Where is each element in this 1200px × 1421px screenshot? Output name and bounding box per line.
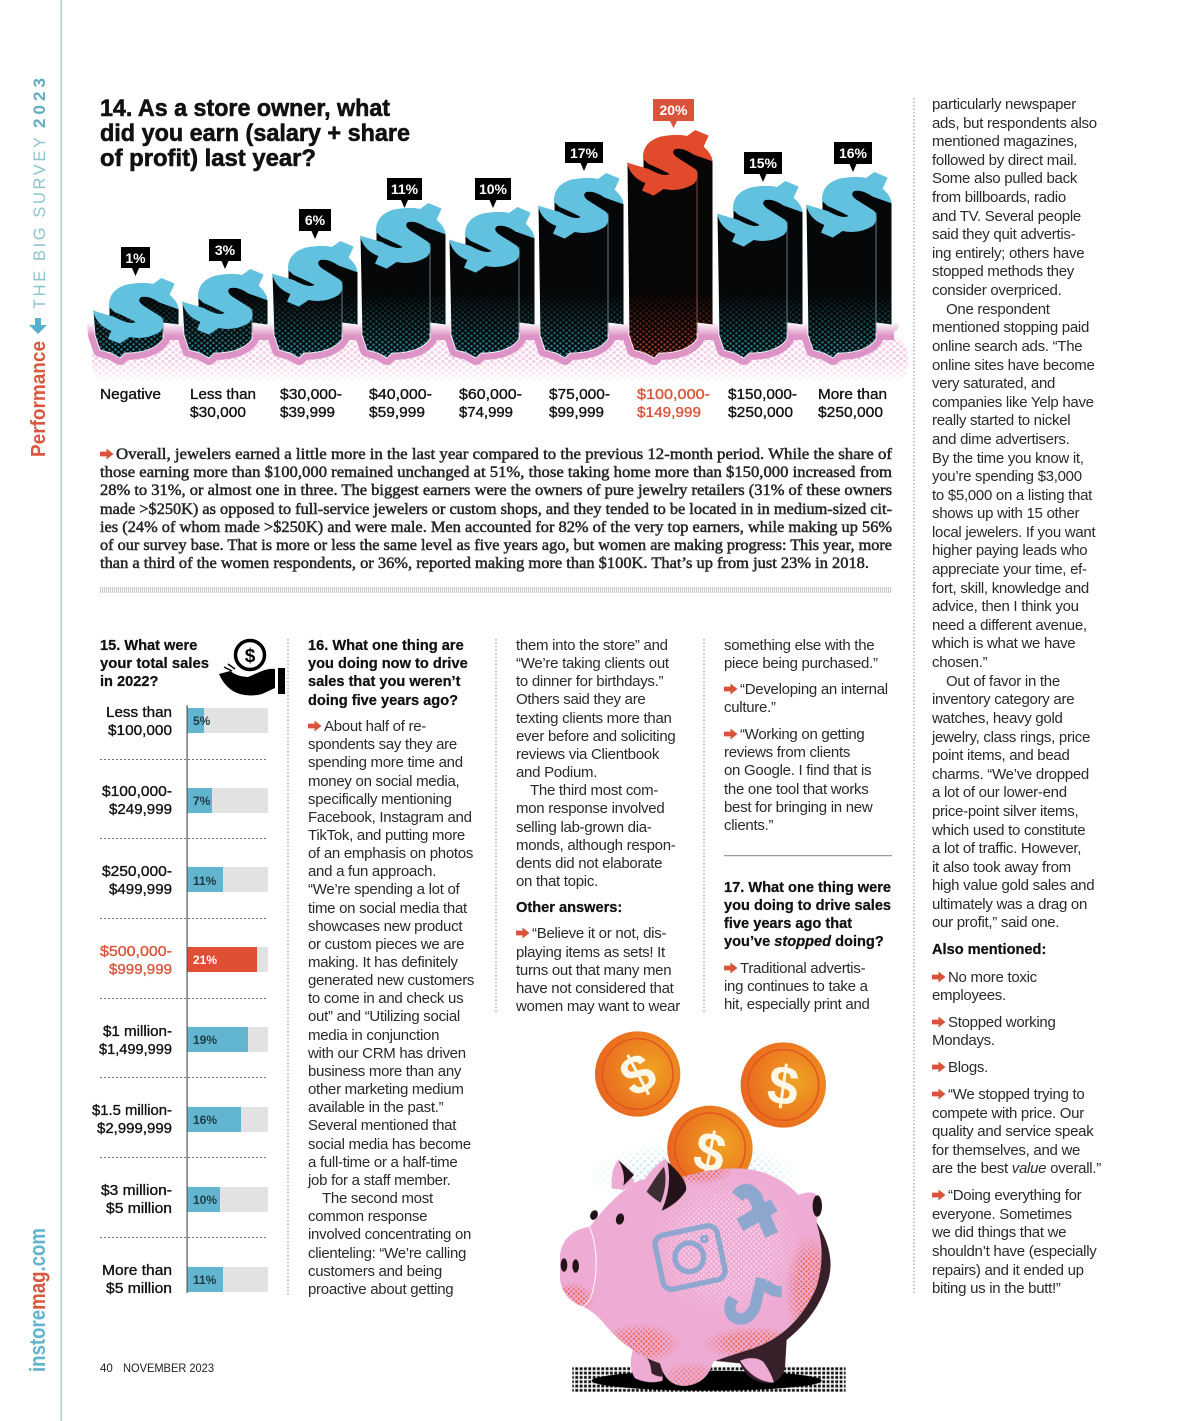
- column: right text: Also mentioned:: [932, 942, 1046, 958]
- bar: less than $100,000: 5%: [193, 714, 211, 728]
- bar: $1.5 million-$2,999,999: [92, 1102, 268, 1137]
- icon: center coin: $: [689, 1118, 731, 1185]
- bar: $40,000-$59,999 11%: 11%: [391, 181, 419, 197]
- heading question 17: you’ve stopped doing?: [724, 934, 884, 950]
- body text: spending more time and: [308, 754, 463, 771]
- heading question 15: [100, 638, 209, 690]
- bar: $3 million-$5 million: [101, 1182, 268, 1217]
- column: right text: By the time you know it,: [932, 450, 1084, 467]
- column: right text: really started to nickel: [932, 412, 1070, 429]
- column: right text: high value gold sales and: [932, 877, 1094, 894]
- body text: generated new customers: [308, 972, 474, 989]
- column: right text: companies like Yelp have: [932, 394, 1094, 411]
- chart category labels: Negative: [100, 386, 161, 403]
- body text: specifically mentioning: [308, 791, 452, 808]
- column: answers and question 17: [724, 637, 892, 1013]
- heading question 17: 17. What one thing were: [724, 880, 891, 896]
- chart category labels: $59,999: [369, 404, 425, 421]
- body text: spondents say they are: [308, 736, 457, 753]
- sidebar: website: instoremag.com: [25, 1228, 50, 1372]
- column: right text: consider overpriced.: [932, 282, 1061, 299]
- column: right text: mentioned stopping paid: [932, 319, 1089, 336]
- heading question 16: 16. What one thing are: [308, 638, 464, 654]
- bar: $100,000-$249,999: [102, 783, 268, 818]
- bar: $1.5 million-$2,999,999: 16%: [193, 1113, 217, 1127]
- chart category labels: $250,000: [728, 404, 793, 421]
- column: question 16 continued: dents did not elaborate: [516, 855, 662, 872]
- column: right text: said they quit advertis-: [932, 226, 1076, 243]
- body text: [307, 718, 474, 1298]
- summary paragraph: than a third of the women respondents, or 36%, reported making more than $100K. That’s up from just 23% in 2018.: [100, 555, 869, 572]
- summary paragraph: of our survey base. That is more or less the same level as five years ago, but women are making progress: This year, more: [100, 537, 892, 554]
- chart category labels: $30,000-: [280, 386, 342, 403]
- icon: right coin: $: [764, 1052, 803, 1118]
- column: question 16 continued: monds, although respon-: [516, 837, 676, 854]
- column: right text: repairs) and it ended up: [932, 1262, 1084, 1279]
- bar: $40,000-$59,999 11%: [360, 178, 446, 358]
- heading question 16: doing five years ago?: [308, 693, 458, 709]
- summary paragraph: 28% to 31%, or almost one in three. The biggest earners were the owners of pure jewelry retailers (31% of these owners: [100, 482, 892, 499]
- dotted row dividers: [100, 760, 268, 1238]
- bar axis: [186, 705, 188, 1293]
- body text: and a fun approach.: [308, 863, 436, 880]
- column: right text: “We stopped trying to: [948, 1086, 1084, 1103]
- column: answers and question 17: culture.”: [724, 699, 776, 716]
- bar: $500,000-$999,999 highlighted: [100, 943, 268, 978]
- chart category labels: $74,999: [459, 404, 513, 421]
- column: right text: biting us in the butt!”: [932, 1280, 1061, 1297]
- title question 14: did you earn (salary + share: [100, 120, 410, 147]
- column: question 16 continued: mon response involved: [516, 800, 664, 817]
- column: answers and question 17: on Google. I find that is: [724, 762, 871, 779]
- body text: of an emphasis on photos: [308, 845, 473, 862]
- chart category labels: $39,999: [280, 404, 335, 421]
- column: right text: for themselves, and we: [932, 1142, 1080, 1159]
- column: question 16 continued: selling lab-grown dia-: [516, 819, 652, 836]
- column: right text: ing entirely; others have: [932, 245, 1084, 262]
- column: right text: and dime advertisers.: [932, 431, 1070, 448]
- column: right text: are the best value overall.”: [932, 1160, 1101, 1177]
- bar: more than $5 million: $5 million: [106, 1280, 172, 1297]
- summary paragraph: [100, 446, 893, 572]
- column: right text: jewelry, class rings, price: [931, 729, 1090, 746]
- bar: more than $5 million: [102, 1262, 268, 1297]
- column: question 16 continued: The third most com-: [530, 782, 658, 799]
- pale halftone behind pig: [597, 1144, 796, 1197]
- column: answers and question 17: ing continues to take a: [724, 978, 869, 995]
- footer page number: 40: [100, 1363, 113, 1375]
- column: right text: particularly newspaper: [932, 96, 1076, 113]
- column: question 16: [307, 638, 474, 1298]
- bar: $1.5 million-$2,999,999: $2,999,999: [97, 1120, 172, 1137]
- bar: $100,000-$249,999: $100,000-: [102, 783, 172, 800]
- chart category labels: $99,999: [549, 404, 604, 421]
- bar: $75,000-$99,999 17%: [538, 142, 624, 358]
- column: question 16 continued: ever before and soliciting: [516, 728, 676, 745]
- body text: money on social media,: [308, 773, 459, 790]
- sidebar: section title: [28, 78, 50, 457]
- pig far ear: [612, 1160, 635, 1190]
- column: question 16 continued: [515, 637, 680, 1015]
- icon: facebook logo: [737, 1191, 774, 1235]
- pig far leg: [740, 1358, 774, 1383]
- bar: $1.5 million-$2,999,999: $1.5 million-: [92, 1102, 172, 1119]
- column: question 16 continued: Other answers:: [516, 900, 622, 916]
- pig dark far side: [713, 1220, 831, 1383]
- bar: less than $100,000: $100,000: [108, 722, 172, 739]
- column: right text: shows up with 15 other: [932, 505, 1080, 522]
- sidebar: section title: Performance: [28, 341, 50, 457]
- bar: $250,000-$499,999: $499,999: [109, 881, 172, 898]
- pink halo: [87, 323, 899, 365]
- bar: $75,000-$99,999 17%: 17%: [570, 145, 599, 161]
- bar: more than $5 million: More than: [102, 1262, 172, 1279]
- body text: showcases new product: [308, 918, 463, 935]
- column: right text: appreciate your time, ef-: [932, 561, 1087, 578]
- column: right text: charms. “We’ve dropped: [932, 766, 1089, 783]
- bar: $30,000-$39,999 6%: 6%: [305, 212, 326, 228]
- bar: $100,000-$249,999: $249,999: [109, 801, 172, 818]
- column: answers and question 17: hit, especially print and: [724, 996, 870, 1013]
- bar: $500,000-$999,999 highlighted: $999,999: [109, 961, 172, 978]
- summary paragraph: those earning more than $100,000 remained unchanged at 51%, those taking home more than $150,000 increased from: [100, 464, 893, 481]
- sidebar rule: [60, 0, 62, 1421]
- chart category labels: $60,000-: [459, 386, 522, 403]
- chart category labels: $149,999: [637, 404, 701, 421]
- column: question 16 continued: reviews via Clientbook: [516, 746, 660, 763]
- bar: $3 million-$5 million: $5 million: [106, 1200, 172, 1217]
- icon: left coin: $: [610, 1040, 666, 1109]
- column: answers and question 17: “Developing an internal: [740, 681, 888, 698]
- icon: right coin: [741, 1042, 826, 1128]
- column: right text: advice, then I think you: [932, 598, 1079, 615]
- column: right text: it also took away from: [932, 859, 1071, 876]
- column: answers and question 17: “Working on getting: [740, 726, 864, 743]
- column: right text: Blogs.: [948, 1059, 988, 1076]
- heading question 17: [724, 880, 891, 950]
- column: right text: followed by direct mail.: [932, 152, 1077, 169]
- column: question 16 continued: them into the store” and: [516, 637, 668, 654]
- body text: to come in and check us: [308, 990, 463, 1007]
- body text: “We’re spending a lot of: [308, 881, 461, 898]
- bar: $3 million-$5 million: 10%: [193, 1193, 217, 1207]
- column: question 16 continued: women may want to wear: [515, 998, 680, 1015]
- heading question 16: sales that you weren’t: [308, 674, 461, 690]
- bar: $250,000-$499,999: $250,000-: [102, 863, 172, 880]
- body text: job for a staff member.: [307, 1172, 451, 1189]
- pink halftone ground: [92, 338, 908, 380]
- icon: tiktok logo: [730, 1278, 782, 1319]
- column: answers and question 17: best for bringing in new: [724, 799, 873, 816]
- bar: $500,000-$999,999 highlighted: 21%: [193, 953, 217, 967]
- heading question 15: in 2022?: [100, 674, 158, 690]
- column: right text: Stopped working: [948, 1014, 1056, 1031]
- bar: $1 million-$1,499,999: [99, 1023, 268, 1058]
- body text: The second most: [322, 1190, 434, 1207]
- column: question 16 continued: to dinner for birthdays.”: [516, 673, 664, 690]
- chart category labels: [100, 386, 887, 421]
- summary paragraph: ies (24% of whom made >$250K) and were male. Men accounted for 82% of the very top earners, while making up 56%: [100, 519, 892, 536]
- column: right text: we did things that we: [931, 1224, 1066, 1241]
- column: right text: point items, and bead: [932, 747, 1070, 764]
- column: answers and question 17: clients.”: [724, 817, 773, 834]
- column: question 16 continued: Others said they are: [516, 691, 645, 708]
- bar: Negative 1%: [93, 247, 179, 358]
- chart category labels: More than: [818, 386, 887, 403]
- column: question 16 continued: playing items as sets! It: [516, 944, 666, 961]
- column: answers and question 17: something else with the: [724, 637, 874, 654]
- body text: making. It has definitely: [308, 954, 459, 971]
- bar: $30,000-$39,999 6%: [272, 209, 358, 358]
- column: right text: stopped methods they: [932, 263, 1075, 280]
- title question 14: 14. As a store owner, what: [100, 95, 390, 122]
- column: right text: ultimately was a drag on: [932, 896, 1087, 913]
- column: question 16 continued: turns out that many men: [516, 962, 671, 979]
- body text: available in the past.”: [308, 1099, 444, 1116]
- column: right text: price-point silver items,: [932, 803, 1078, 820]
- bar: less than $100,000: [106, 704, 268, 739]
- column: right text: watches, heavy gold: [931, 710, 1063, 727]
- column: right text: higher paying leads who: [932, 542, 1087, 559]
- pig near back leg: [631, 1348, 663, 1382]
- heading question 16: [308, 638, 468, 709]
- column: right text: very saturated, and: [932, 375, 1055, 392]
- body text: common response: [308, 1208, 427, 1225]
- body text: a full-time or a half-time: [308, 1154, 457, 1171]
- heading question 17: five years ago that: [724, 916, 852, 932]
- bar: $150,000-$250,000 15%: 15%: [749, 155, 778, 171]
- column: right text: ads, but respondents also: [932, 115, 1097, 132]
- column: right text: everyone. Sometimes: [932, 1206, 1072, 1223]
- column: right text: [931, 96, 1101, 1297]
- heading question 15: your total sales: [100, 656, 209, 672]
- heading question 17: you doing to drive sales: [724, 898, 891, 914]
- icon: instagram logo: [653, 1224, 727, 1291]
- column: right text: to $5,000 on a listing that: [932, 487, 1093, 504]
- column: question 16 continued: on that topic.: [516, 873, 598, 890]
- summary paragraph: made >$250K) as opposed to full-service jewelers or custom shops, and they tended to be located in in medium-sized cit-: [100, 501, 892, 518]
- bar: Negative 1%: 1%: [125, 250, 146, 266]
- column: right text: employees.: [932, 987, 1006, 1004]
- column: question 16 continued: “Believe it or not, dis-: [532, 925, 666, 942]
- column: question 16 continued: “We’re taking clients out: [516, 655, 670, 672]
- column: answers and question 17: piece being purchased.”: [724, 655, 878, 672]
- chart category labels: $40,000-: [369, 386, 432, 403]
- pig near ear: [639, 1158, 686, 1211]
- chart category labels: $30,000: [190, 404, 246, 421]
- column: right text: Out of favor in the: [946, 673, 1060, 690]
- column: right text: need a different avenue,: [932, 617, 1087, 634]
- bar: $150,000-$250,000 15%: [717, 152, 803, 358]
- body text: business more than any: [308, 1063, 462, 1080]
- column: answers and question 17: the one tool that works: [724, 781, 868, 798]
- column: right text: which is what we have: [931, 635, 1075, 652]
- illustration: piggy bank with coins: [548, 1031, 846, 1392]
- icon: hand holding coin: $: [245, 646, 256, 667]
- bar: $1 million-$1,499,999: $1,499,999: [99, 1041, 172, 1058]
- pig snout edge: [582, 1227, 596, 1307]
- title question 14: of profit) last year?: [100, 145, 316, 172]
- bar: More than $250,000 16%: 16%: [839, 145, 868, 161]
- pig halftone shading: [548, 1155, 835, 1392]
- column: right text: quality and service speak: [932, 1123, 1094, 1140]
- column: right text: a lot of traffic. However,: [932, 840, 1081, 857]
- body text: media in conjunction: [308, 1027, 439, 1044]
- bar: $100,000-$249,999: 7%: [193, 794, 211, 808]
- column: right text: No more toxic: [948, 969, 1038, 986]
- column: right text: which used to constitute: [931, 822, 1085, 839]
- column: right text: online sites have become: [932, 357, 1095, 374]
- bar: Less than $30,000 3%: [182, 239, 268, 358]
- column: right text: from billboards, radio: [932, 189, 1066, 206]
- panel: question 15 total sales: [92, 638, 285, 1297]
- body text: Facebook, Instagram and: [308, 809, 472, 826]
- column: right text: fort, skill, knowledge and: [932, 580, 1089, 597]
- column: right text: and TV. Several people: [932, 208, 1081, 225]
- column: right text: mentioned magazines,: [932, 133, 1077, 150]
- body text: Several mentioned that: [308, 1117, 457, 1134]
- title question 14: [100, 95, 410, 172]
- body text: time on social media that: [308, 900, 468, 917]
- column: question 16 continued: and Podium.: [516, 764, 597, 781]
- heading question 16: you doing now to drive: [308, 656, 468, 672]
- bar: $500,000-$999,999 highlighted: $500,000-: [100, 943, 172, 960]
- column: right text: “Doing everything for: [948, 1187, 1082, 1204]
- bar: $1 million-$1,499,999: 19%: [193, 1033, 217, 1047]
- body text: other marketing medium: [308, 1081, 464, 1098]
- bar: $250,000-$499,999: 11%: [193, 874, 217, 888]
- column: question 16 continued: texting clients more than: [516, 710, 672, 727]
- column: right text: compete with price. Our: [932, 1105, 1084, 1122]
- column: right text: Mondays.: [932, 1032, 995, 1049]
- body text: social media has become: [308, 1136, 471, 1153]
- bar: $60,000-$74,999 10%: [449, 178, 535, 358]
- summary paragraph: Overall, jewelers earned a little more in the last year compared to the previous 12-month period. While the share of: [116, 446, 893, 463]
- sidebar: section title: THE BIG SURVEY: [31, 137, 49, 309]
- column: answers and question 17: Traditional advertis-: [740, 960, 866, 977]
- body text: out” and “Utilizing social: [308, 1008, 460, 1025]
- column: right text: chosen.”: [932, 654, 988, 671]
- bar: $1 million-$1,499,999: $1 million-: [103, 1023, 172, 1040]
- bar: $100,000-$149,999 20% highlighted: [627, 99, 713, 358]
- sidebar: section title: 2023: [30, 78, 49, 128]
- column: right text: online search ads. “The: [932, 338, 1082, 355]
- footer page number: NOVEMBER 2023: [123, 1363, 214, 1375]
- chart category labels: Less than: [190, 386, 256, 403]
- column: right text: a lot of our lower-end: [932, 784, 1067, 801]
- column: answers and question 17: reviews from clients: [724, 744, 850, 761]
- body text: involved concentrating on: [308, 1226, 471, 1243]
- body text: clienteling: “We’re calling: [308, 1245, 466, 1262]
- column: right text: our profit,” said one.: [932, 914, 1059, 931]
- bar: more than $5 million: 11%: [193, 1273, 217, 1287]
- chart category labels: $100,000-: [637, 386, 710, 403]
- bar: More than $250,000 16%: [806, 142, 892, 358]
- bar: Less than $30,000 3%: 3%: [215, 242, 236, 258]
- column: right text: Some also pulled back: [932, 170, 1078, 187]
- heading question 15: 15. What were: [100, 638, 197, 654]
- column: right text: local jewelers. If you want: [932, 524, 1096, 541]
- bar: $100,000-$149,999 20% highlighted: 20%: [659, 102, 688, 118]
- chart category labels: $150,000-: [728, 386, 797, 403]
- hatched divider: [100, 587, 892, 593]
- pig eyes and nostrils: [561, 1209, 625, 1273]
- column: right text: One respondent: [946, 301, 1051, 318]
- body text: TikTok, and putting more: [308, 827, 465, 844]
- bar: $60,000-$74,999 10%: 10%: [479, 181, 508, 197]
- column: right text: you’re spending $3,000: [932, 468, 1082, 485]
- column dividers: [288, 98, 914, 1295]
- body text: with our CRM has driven: [307, 1045, 466, 1062]
- bar: $250,000-$499,999: [102, 863, 268, 898]
- body text: About half of re-: [324, 718, 426, 735]
- ground shadow: [572, 1367, 846, 1392]
- column: question 16 continued: have not considered that: [516, 980, 675, 997]
- bar: $3 million-$5 million: $3 million-: [101, 1182, 172, 1199]
- chart category labels: $250,000: [818, 404, 883, 421]
- column: right text: inventory category are: [932, 691, 1074, 708]
- icon: hand holding coin: [219, 640, 285, 696]
- chart: 3D dollar sign earnings: [92, 99, 908, 384]
- column: right text: shouldn’t have (especially: [932, 1243, 1097, 1260]
- pig body: [560, 1168, 822, 1386]
- body text: customers and being: [308, 1263, 442, 1280]
- bar: less than $100,000: Less than: [106, 704, 172, 721]
- pig tail: [813, 1195, 822, 1217]
- body text: or custom pieces we are: [308, 936, 464, 953]
- icon: left coin: [595, 1031, 680, 1117]
- icon: center coin: [667, 1106, 753, 1191]
- body text: proactive about getting: [308, 1281, 453, 1298]
- chart category labels: $75,000-: [549, 386, 610, 403]
